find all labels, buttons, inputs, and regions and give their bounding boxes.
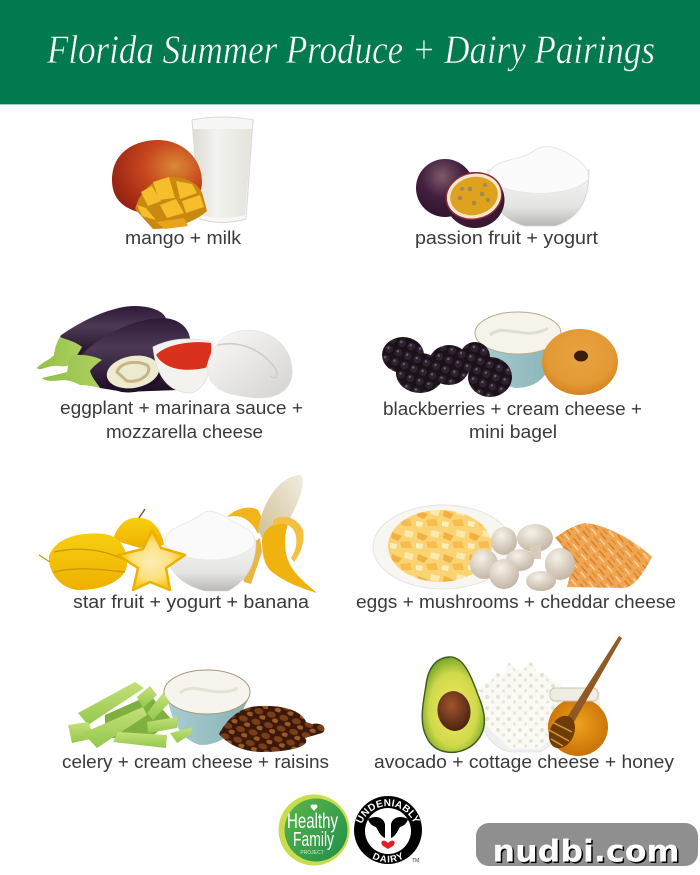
icon: cream cheese bowl <box>164 670 250 745</box>
header banner <box>0 0 700 105</box>
label: eggs + mushrooms + cheddar cheese <box>356 592 676 612</box>
watermark: nudbi.com <box>492 834 680 870</box>
logo: Healthy Family Project: Family <box>293 829 334 851</box>
icon: shredded cheddar <box>555 523 652 588</box>
icon: mango <box>112 140 207 229</box>
icon: cottage cheese bowl <box>476 661 570 752</box>
icon: passion fruit <box>416 159 506 228</box>
label: avocado + cottage cheese + honey <box>374 752 674 772</box>
logo: Undeniably Dairy <box>354 796 422 864</box>
icon: cream cheese bowl <box>475 312 561 388</box>
panel: passion fruit + yogurt <box>415 147 598 248</box>
icon: banana <box>227 475 317 593</box>
icon: blackberries <box>382 337 512 397</box>
label: blackberries + cream cheese + <box>383 399 642 419</box>
icon: yogurt bowl <box>488 147 589 226</box>
panel: blackberries + cream cheese + mini bagel: mini bagel <box>469 422 557 442</box>
panel: avocado + cottage cheese + honey <box>374 636 674 772</box>
logo: Healthy Family Project: PROJECT <box>300 850 324 856</box>
icon: marinara bowl <box>153 339 212 393</box>
panel: eggplant + marinara + mozzarella: mozzarella cheese <box>106 422 263 442</box>
icon: glass of milk <box>192 117 253 222</box>
panel: eggplant + marinara + mozzarella <box>37 306 303 442</box>
icon: eggplant slice <box>104 352 164 397</box>
icon: mozzarella <box>207 330 292 398</box>
label: celery + cream cheese + raisins <box>62 752 329 772</box>
label: passion fruit + yogurt <box>415 228 598 248</box>
logo: Healthy Family Project: Healthy <box>287 810 338 833</box>
panel: celery + cream cheese + raisins <box>62 670 329 772</box>
label: mango + milk <box>125 228 242 248</box>
watermark <box>476 823 698 871</box>
icon: raisins <box>219 706 325 752</box>
icon: honey jar with dipper <box>544 636 622 756</box>
label: star fruit + yogurt + banana <box>73 592 310 612</box>
logo: Healthy Family Project <box>278 794 350 866</box>
icon: mini bagel <box>542 329 618 395</box>
panel: blackberries + cream cheese + mini bagel <box>382 312 642 442</box>
logo: Undeniably Dairy: TM <box>412 858 419 864</box>
icon: star fruit whole <box>39 509 164 590</box>
icon: avocado <box>422 657 484 752</box>
icon: mushrooms <box>470 524 575 591</box>
icon: star fruit slice <box>118 530 185 590</box>
label: eggplant + marinara sauce + <box>60 398 303 418</box>
icon: celery <box>68 682 193 748</box>
panel: star fruit + yogurt + banana <box>39 475 317 612</box>
panel: mango + milk <box>112 117 253 248</box>
logo: Undeniably Dairy: UNDENIABLY <box>356 799 420 823</box>
icon: yogurt bowl <box>165 511 256 591</box>
watermark: nudbi.com <box>494 836 681 871</box>
icon: scrambled eggs plate <box>373 505 513 589</box>
panel: eggs + mushrooms + cheddar <box>356 505 676 612</box>
logo: Undeniably Dairy: DAIRY <box>372 852 402 862</box>
icon: eggplants <box>37 306 190 392</box>
